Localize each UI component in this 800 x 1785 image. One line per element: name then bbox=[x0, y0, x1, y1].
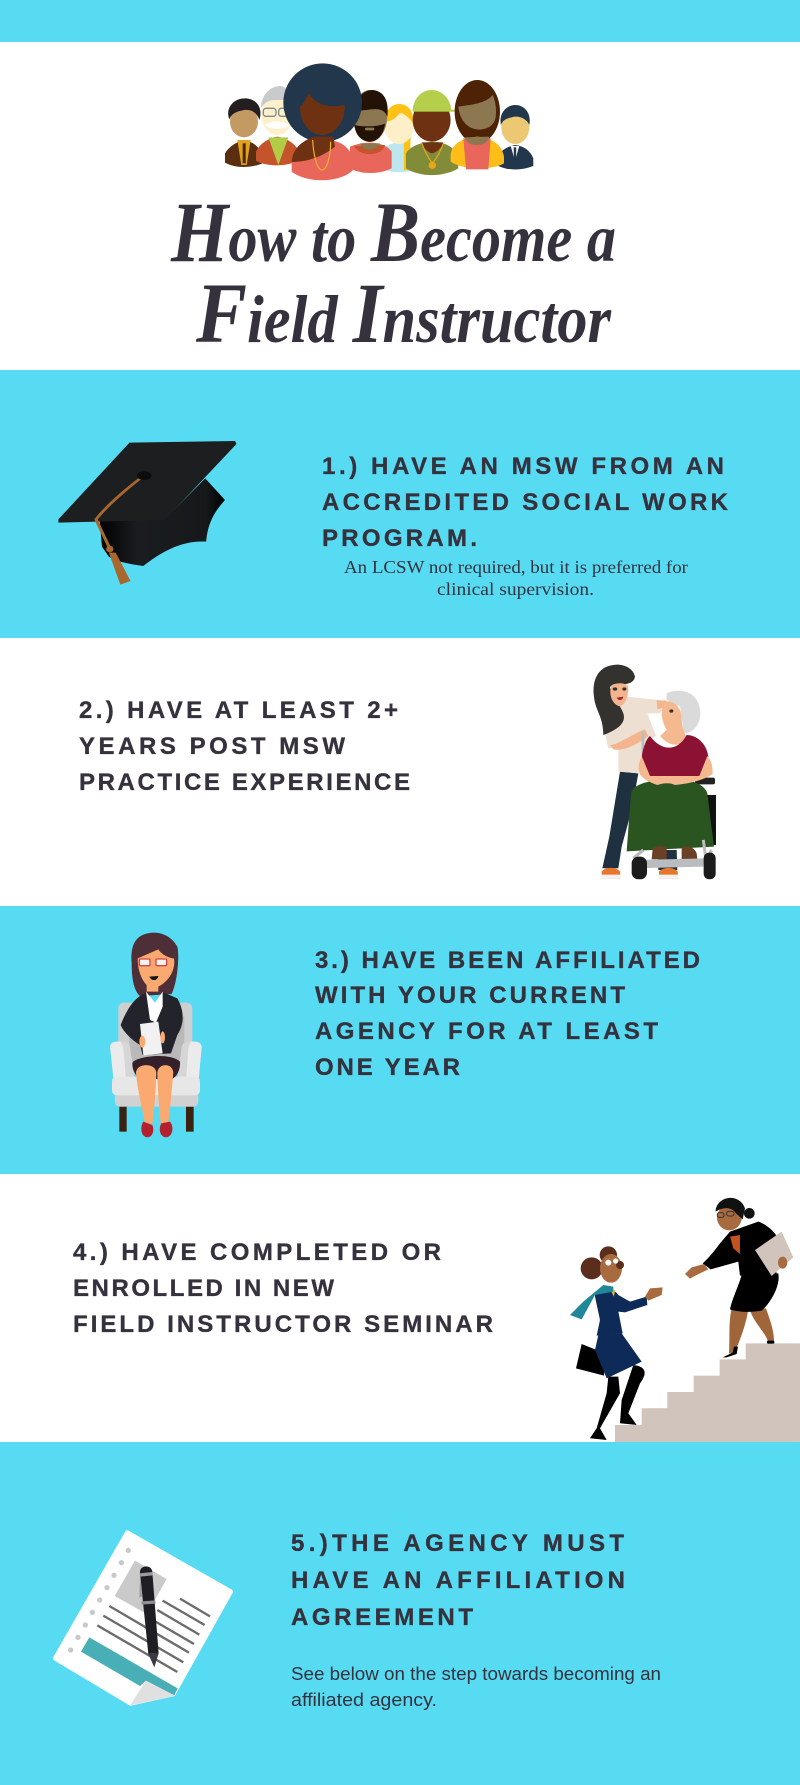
step 1 note bbox=[344, 557, 688, 599]
step 5 body text bbox=[291, 1664, 661, 1710]
title line 2: Field Instructor bbox=[195, 265, 611, 361]
stairs bbox=[615, 1343, 800, 1442]
wheelchair and seated woman bbox=[627, 691, 716, 879]
person: bearded man bbox=[350, 90, 392, 173]
person: woman with long hair and yellow jacket bbox=[451, 80, 504, 169]
step 1 heading: 1.) HAVE AN MSW FROM AN bbox=[322, 453, 724, 480]
title bbox=[170, 184, 616, 361]
icon: group of diverse people bbox=[225, 63, 533, 180]
caregiver bbox=[594, 665, 679, 879]
person: man in navy suit bbox=[498, 105, 533, 169]
step 1 heading: PROGRAM. bbox=[322, 525, 477, 552]
step 4 heading: 4.) HAVE COMPLETED OR bbox=[73, 1239, 441, 1266]
icon: mentor reaching to woman climbing stairs bbox=[570, 1198, 800, 1442]
step 1 note: clinical supervision. bbox=[437, 579, 594, 599]
step 5 heading: 5.)THE AGENCY MUST bbox=[291, 1530, 624, 1557]
icon: document and pen bbox=[55, 1533, 231, 1705]
icon: woman seated in armchair bbox=[110, 933, 202, 1137]
person: man in brown suit bbox=[225, 98, 263, 167]
step 4 heading: ENROLLED IN NEW bbox=[73, 1275, 334, 1302]
person: older man with glasses bbox=[256, 86, 299, 165]
step 4 heading: FIELD INSTRUCTOR SEMINAR bbox=[73, 1311, 493, 1338]
step 2 heading bbox=[79, 697, 410, 796]
step 5 heading: AGREEMENT bbox=[291, 1604, 473, 1631]
step 3 heading: AGENCY FOR AT LEAST bbox=[315, 1018, 658, 1045]
panel: header bbox=[0, 42, 800, 370]
step 3 heading bbox=[315, 947, 700, 1081]
step 1 heading: ACCREDITED SOCIAL WORK bbox=[322, 489, 729, 516]
mentor bbox=[685, 1198, 793, 1357]
panel: step 4 bbox=[0, 1174, 800, 1442]
person: woman with large afro bbox=[283, 63, 362, 180]
step 3 heading: 3.) HAVE BEEN AFFILIATED bbox=[315, 947, 700, 974]
panel: step 3 bbox=[0, 906, 800, 1174]
step 5 heading: HAVE AN AFFILIATION bbox=[291, 1567, 625, 1594]
step 2 heading: YEARS POST MSW bbox=[79, 733, 345, 760]
step 5 heading bbox=[291, 1530, 625, 1631]
step 2 heading: 2.) HAVE AT LEAST 2+ bbox=[79, 697, 398, 724]
step 3 heading: WITH YOUR CURRENT bbox=[315, 982, 625, 1009]
panel: step 2 bbox=[0, 638, 800, 906]
step 4 heading bbox=[73, 1239, 493, 1338]
person: blonde woman bbox=[383, 104, 414, 172]
icon: caregiver with woman in wheelchair bbox=[594, 665, 716, 879]
person: man with green cap bbox=[406, 90, 458, 175]
step 1 heading bbox=[322, 453, 729, 552]
title line 1: How to Become a bbox=[170, 184, 616, 280]
step 3 heading: ONE YEAR bbox=[315, 1054, 460, 1081]
panel: step 5 bbox=[0, 1442, 800, 1785]
climbing woman bbox=[570, 1246, 663, 1440]
step 1 note: An LCSW not required, but it is preferred for bbox=[344, 557, 688, 577]
panel: step 1 bbox=[0, 370, 800, 638]
step 2 heading: PRACTICE EXPERIENCE bbox=[79, 769, 410, 796]
step 5 body text: affiliated agency. bbox=[291, 1690, 437, 1710]
step 5 body text: See below on the step towards becoming an bbox=[291, 1664, 661, 1684]
icon: graduation cap bbox=[58, 441, 236, 585]
